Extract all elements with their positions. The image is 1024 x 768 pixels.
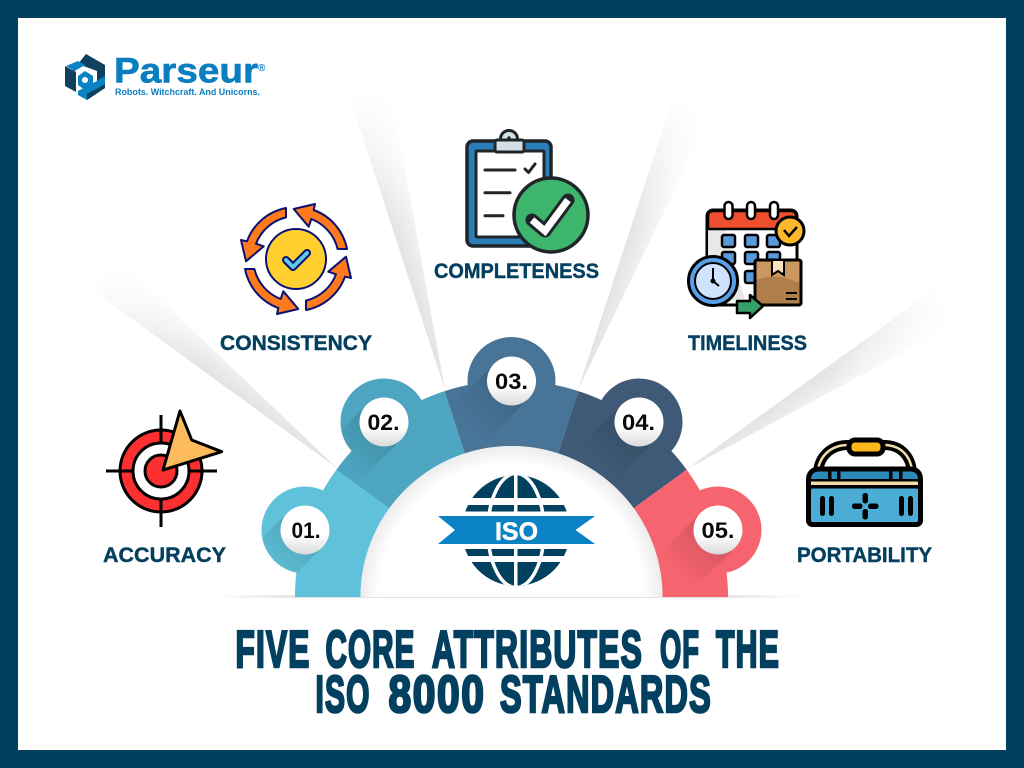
icon: ISO globe xyxy=(438,474,595,588)
segment 02 xyxy=(336,378,465,508)
label: accuracy: ACCURACY xyxy=(103,544,226,567)
title: ISO xyxy=(316,666,370,724)
long shadows xyxy=(246,364,735,589)
central hub xyxy=(360,446,662,597)
title: OF xyxy=(660,621,700,679)
number 05 xyxy=(694,506,742,554)
floor shadow xyxy=(215,595,805,598)
semicircle diagram xyxy=(246,337,761,597)
number 02: 02. xyxy=(368,410,400,435)
segment 04 xyxy=(558,378,687,508)
title: FIVE xyxy=(236,621,310,679)
title: THE xyxy=(716,621,780,679)
label: portability: PORTABILITY xyxy=(797,544,932,567)
icon: calendar timeliness xyxy=(688,202,804,318)
label: consistency: CONSISTENCY xyxy=(220,332,372,355)
ISO label: ISO xyxy=(495,518,538,546)
segment 01 xyxy=(262,470,389,597)
number 05: 05. xyxy=(702,518,734,543)
logo: Parseur xyxy=(65,52,266,100)
registered mark: ® xyxy=(258,63,266,74)
title xyxy=(236,621,780,724)
logo tagline: Robots. Witchcraft. And Unicorns. xyxy=(115,87,260,97)
icon: portable bag xyxy=(808,440,921,524)
icon: clipboard completeness xyxy=(467,130,588,252)
icon: target accuracy xyxy=(106,411,222,527)
number 02 xyxy=(360,398,408,446)
number 01: 01. xyxy=(292,518,320,543)
segment 05 xyxy=(634,470,762,597)
label: completeness: COMPLETENESS xyxy=(434,260,599,283)
label: timeliness: TIMELINESS xyxy=(688,332,807,355)
number 01 xyxy=(280,506,330,554)
title: 8000 xyxy=(388,666,486,724)
icon: consistency cycle xyxy=(241,204,351,314)
number 03 xyxy=(487,356,536,406)
title: CORE xyxy=(326,621,416,679)
icon: Parseur hexagon xyxy=(65,54,105,100)
number 04: 04. xyxy=(622,410,655,435)
segment 03 xyxy=(445,337,578,453)
number 03: 03. xyxy=(495,369,528,394)
light rays xyxy=(86,82,962,503)
ISO ribbon xyxy=(438,516,595,544)
title: STANDARDS xyxy=(500,666,712,724)
title: ATTRIBUTES xyxy=(432,621,643,679)
logo wordmark: Parseur xyxy=(114,52,258,90)
number 04 xyxy=(614,398,664,446)
